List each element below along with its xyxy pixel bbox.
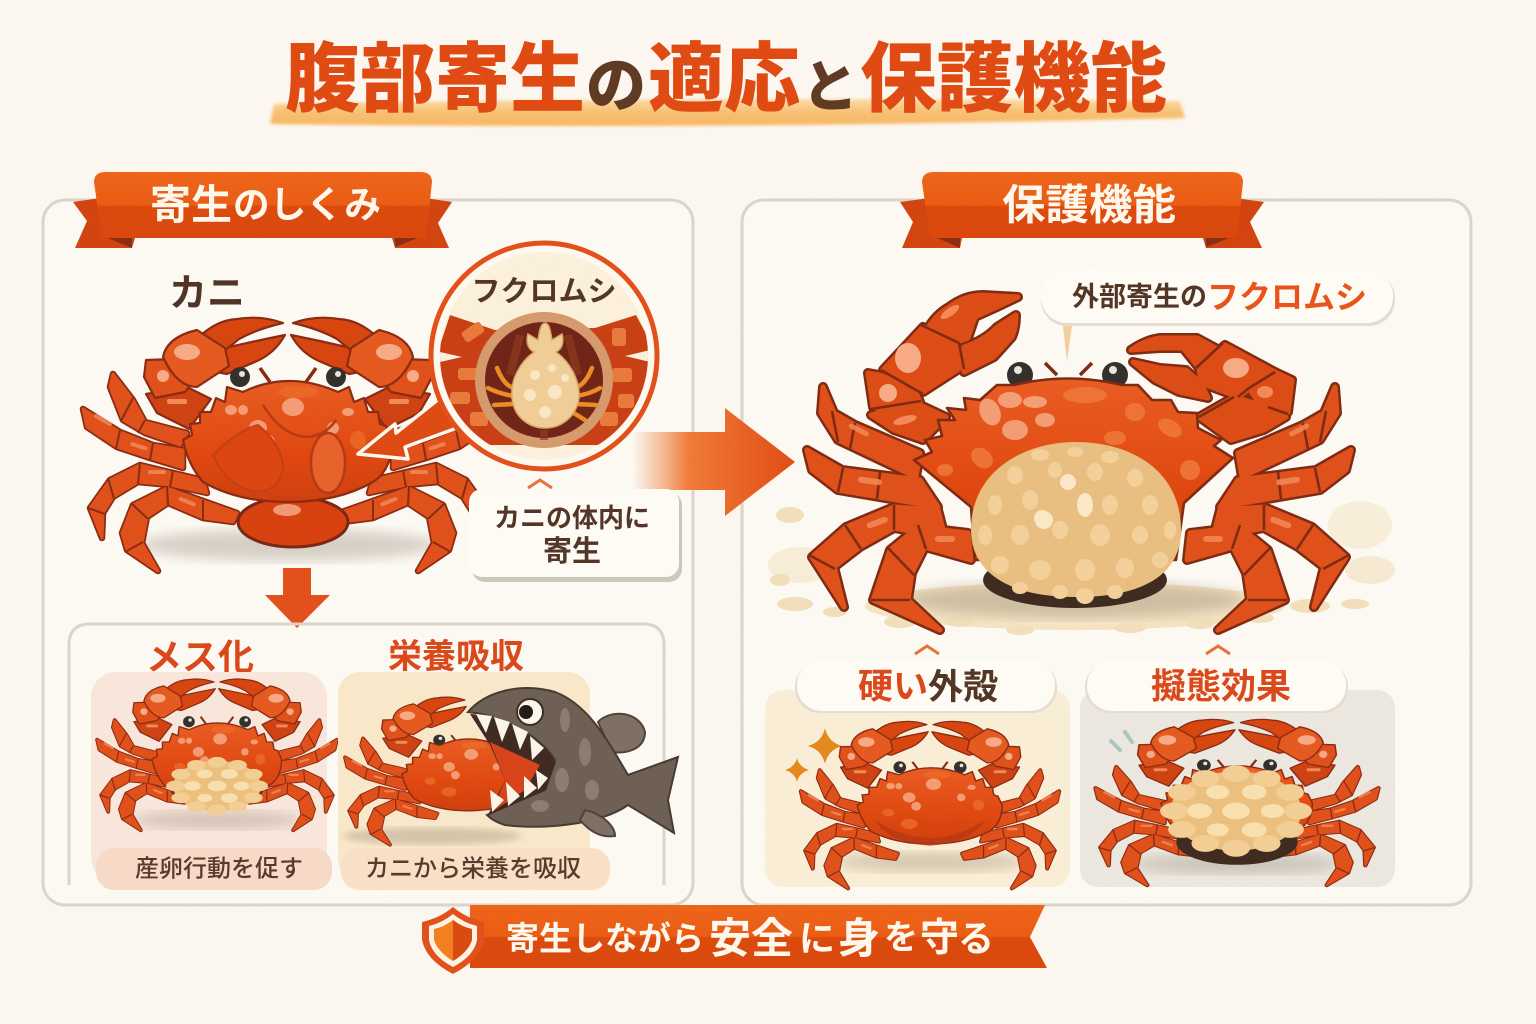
heading ribbon: 保護機能: 保護機能 bbox=[1002, 182, 1176, 228]
carapace bbox=[914, 378, 1233, 560]
magnifier: フクロムシ bbox=[431, 243, 660, 469]
icon: shield bbox=[422, 907, 484, 974]
sparkles bbox=[785, 728, 842, 782]
heading ribbon: 保護機能 bbox=[900, 172, 1264, 248]
panel: メス化 bbox=[91, 636, 337, 890]
right claw bbox=[1131, 338, 1292, 440]
heading: 栄養吸収: 栄養吸収 bbox=[388, 638, 524, 676]
pill bbox=[795, 660, 1057, 713]
bottom banner: 守 bbox=[920, 916, 959, 960]
fish bbox=[468, 688, 678, 836]
callout: 外部寄生のフクロムシ bbox=[1041, 270, 1395, 362]
pill: 擬態効果 bbox=[1151, 668, 1291, 706]
bottom banner: 寄生しながら bbox=[506, 920, 704, 956]
title: の bbox=[586, 52, 646, 120]
arrow: down bbox=[265, 568, 330, 628]
panel: 栄養吸収 bbox=[338, 638, 678, 890]
sand bbox=[768, 501, 1395, 635]
crab: large with external parasite bbox=[807, 295, 1351, 630]
heading ribbon: 寄生のしくみ: のしくみ bbox=[233, 184, 381, 226]
callout: 外部寄生のフクロムシ: 外部寄生の bbox=[1072, 282, 1207, 312]
heading ribbon: 寄生のしくみ bbox=[73, 172, 452, 248]
label: カニ: カニ bbox=[169, 273, 245, 315]
camouflage marks bbox=[1111, 732, 1132, 750]
legs bbox=[807, 387, 1351, 630]
panel: protective function bbox=[742, 200, 1471, 905]
crab being eaten bbox=[342, 697, 534, 845]
heading ribbon: 寄生のしくみ: 寄生 bbox=[150, 182, 232, 228]
inner panel frame bbox=[69, 624, 664, 885]
arrow: magnifier to crab bbox=[358, 398, 475, 459]
callout: カニの体内に寄生: 寄生 bbox=[543, 535, 601, 568]
callout: カニの体内に寄生 bbox=[469, 480, 682, 582]
caption: カニから栄養を吸収 bbox=[365, 856, 581, 882]
left claw bbox=[868, 295, 1018, 440]
bottom banner: を bbox=[884, 919, 918, 957]
caption bbox=[341, 848, 610, 890]
crab with egg sac bbox=[97, 679, 337, 830]
crab with hard shell bbox=[801, 721, 1059, 888]
crab with egg cover bbox=[1096, 719, 1378, 885]
eyes bbox=[1007, 362, 1128, 388]
panel: parasite mechanism bbox=[43, 200, 693, 905]
arrow: gradient to right panel bbox=[632, 408, 795, 516]
title: 腹部寄生 bbox=[285, 38, 585, 122]
callout: カニの体内に寄生: カニの体内に bbox=[494, 503, 650, 533]
egg sac bbox=[971, 442, 1181, 608]
caption bbox=[96, 848, 332, 890]
magnifier: フクロムシ: フクロムシ bbox=[471, 276, 617, 308]
heading: メス化: メス化 bbox=[146, 636, 254, 678]
bottom banner: る bbox=[958, 918, 994, 958]
pill: 硬い外殻 bbox=[858, 668, 998, 706]
bottom banner: 身 bbox=[838, 914, 880, 962]
panel: 擬態効果 bbox=[1080, 646, 1395, 887]
title: 適応 bbox=[648, 38, 800, 122]
bottom banner: に bbox=[799, 918, 835, 958]
crab: main bbox=[83, 318, 493, 571]
bottom banner: 安全 bbox=[709, 914, 793, 962]
panel: 硬い外殻 bbox=[765, 646, 1070, 888]
title: と bbox=[802, 56, 858, 118]
caption: 産卵行動を促す bbox=[135, 856, 303, 882]
pill bbox=[1085, 660, 1348, 713]
title: 保護機能 bbox=[860, 38, 1167, 122]
bottom banner bbox=[470, 905, 1047, 968]
callout: 外部寄生のフクロムシ: フクロムシ bbox=[1207, 279, 1367, 315]
title bbox=[270, 38, 1185, 126]
